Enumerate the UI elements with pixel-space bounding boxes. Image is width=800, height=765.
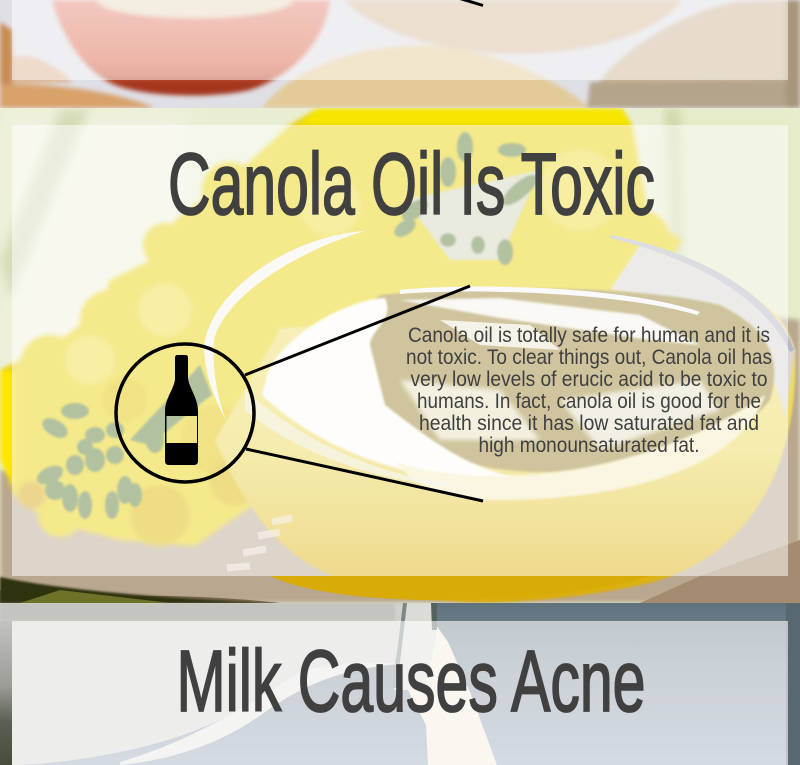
milk stream [408, 625, 497, 765]
section: grains photo background [0, 0, 800, 108]
circle [116, 344, 254, 482]
glass lip [394, 603, 436, 690]
rice [97, 0, 293, 18]
flowers [0, 108, 682, 546]
left grains [0, 20, 16, 88]
center grains [262, 46, 590, 108]
text block: canola oil explanation: high monounsaturated fat. [478, 434, 700, 457]
text block: canola oil explanation [406, 324, 772, 457]
jug [0, 603, 405, 765]
section: milk photo background [0, 603, 800, 765]
text block: canola oil explanation: very low levels of erucic acid to be toxic to [410, 368, 768, 391]
pointer line: upper [245, 286, 470, 375]
decorative tablecloth ticks [227, 518, 292, 568]
tablecloth [0, 300, 800, 603]
band lower bowl [270, 576, 650, 600]
bud clusters [34, 132, 542, 519]
section: canola oil photo background [0, 108, 800, 603]
icon: bottle in circle with pointer lines [116, 286, 483, 501]
text block: canola oil explanation: not toxic. To clear things out, Canola oil has [406, 346, 772, 369]
right grains [598, 0, 788, 85]
glass wall: flowers show through left, grey right [610, 245, 795, 420]
white bowl [345, 0, 682, 54]
panel: canola oil overlay [12, 125, 788, 576]
text block: canola oil explanation: Canola oil is totally safe for human and it is [408, 324, 770, 347]
jug rim highlight [120, 662, 400, 765]
pointer line: lower [246, 449, 483, 501]
bottle [165, 355, 198, 465]
glass rim highlights [204, 231, 365, 420]
pointer line: top fragment [455, 0, 483, 6]
panel: top overlay [12, 0, 788, 80]
panel: milk overlay [12, 621, 788, 765]
text block: canola oil explanation: health since it has low saturated fat and [419, 412, 759, 435]
pink bowl [52, 0, 330, 95]
glass bowl [215, 292, 795, 602]
text block: canola oil explanation: humans. In fact, canola oil is good for the [417, 390, 761, 413]
brown oil with reflections [360, 288, 774, 472]
